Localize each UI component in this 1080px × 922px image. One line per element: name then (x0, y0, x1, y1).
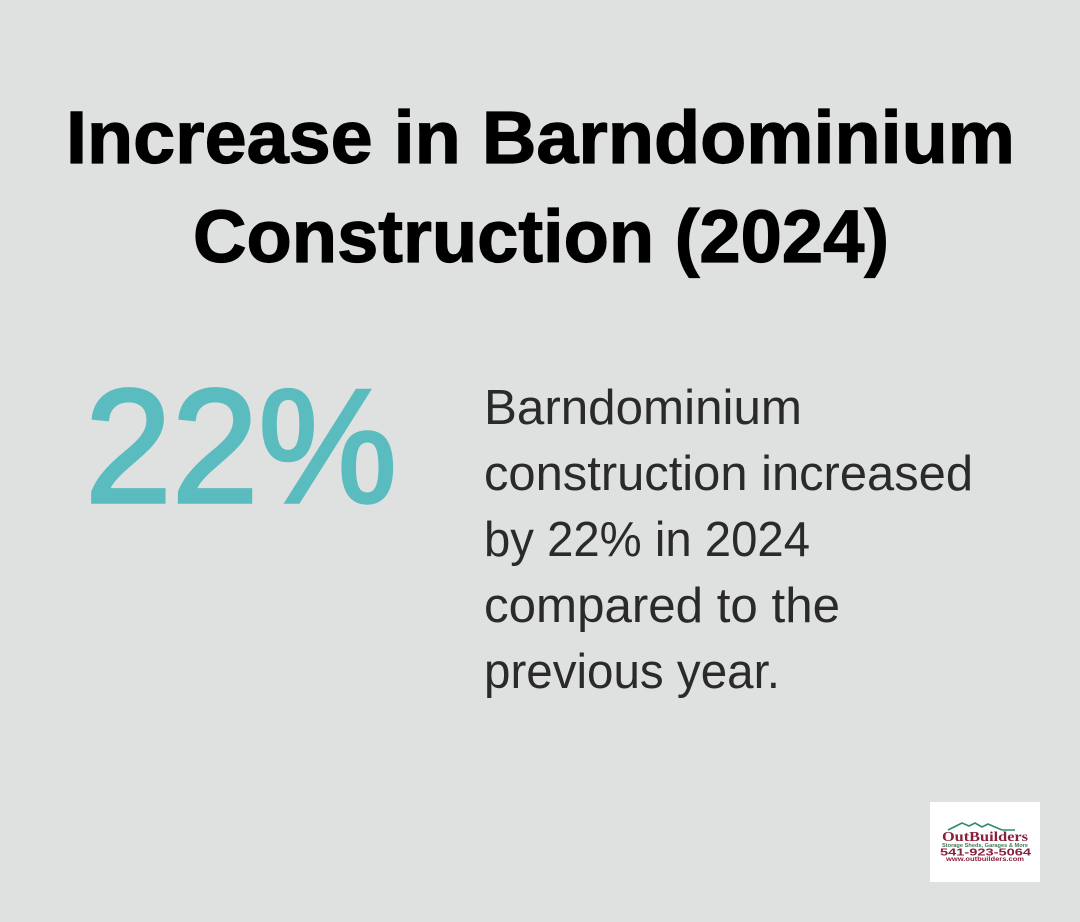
title: Construction (2024) (193, 195, 889, 278)
logo website: www.outbuilders.com (945, 857, 1024, 863)
logo tagline: Storage Sheds, Garages & More (942, 843, 1028, 849)
description text (484, 381, 973, 699)
description text: previous year. (484, 645, 780, 699)
description text: construction increased (484, 447, 973, 501)
logo phone number: 541-923-5064 (940, 848, 1032, 858)
logo: OutBuilders (930, 802, 1040, 882)
icon: house roofs (948, 823, 1015, 830)
description text: compared to the (484, 579, 840, 633)
title (66, 96, 1015, 278)
logo name: OutBuilders (942, 830, 1029, 845)
title: Increase in Barndominium (66, 96, 1015, 179)
big statistic: 22%: 22% (85, 356, 397, 537)
description text: Barndominium (484, 381, 802, 435)
description text: by 22% in 2024 (484, 513, 810, 567)
